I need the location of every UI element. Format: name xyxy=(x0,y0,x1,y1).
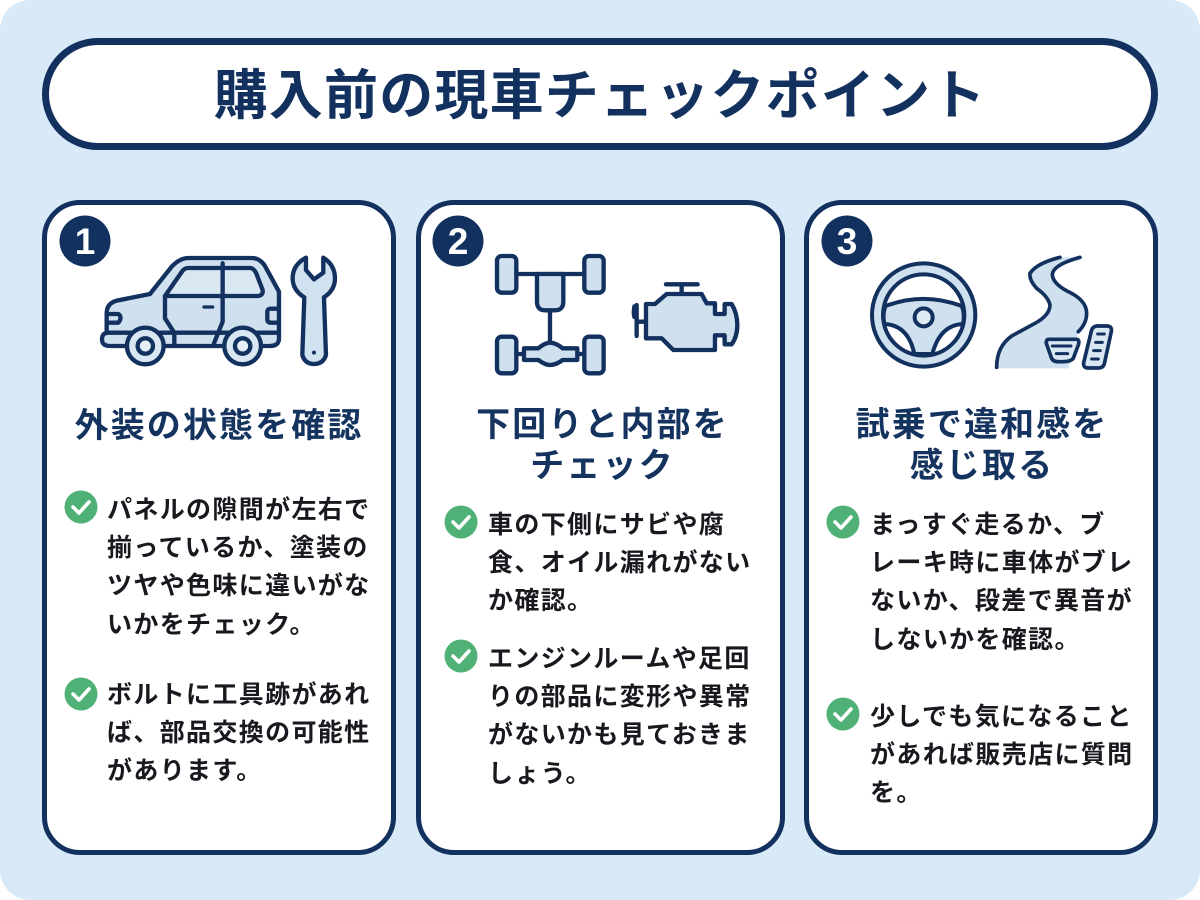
title banner xyxy=(42,38,1158,150)
number badge 1: 1 xyxy=(75,221,95,262)
text 3-1: しないかを確認。 xyxy=(870,626,1081,654)
heading: underbody xyxy=(476,406,729,485)
text 3-2 xyxy=(870,703,1134,807)
text 2-2: エンジンルームや足回 xyxy=(488,645,751,673)
heading: underbody: 下回りと内部を xyxy=(476,406,729,444)
text 3-1 xyxy=(870,511,1134,654)
text 3-2: を。 xyxy=(870,779,923,807)
text 3-1: まっすぐ走るか、ブ xyxy=(870,511,1106,539)
text 1-1: 揃っているか、塗装の xyxy=(107,534,369,562)
title banner: 購入前の現車チェックポイント xyxy=(214,66,986,126)
text 2-1: 車の下側にサビや腐 xyxy=(488,511,725,539)
heading: underbody: チェック xyxy=(530,447,675,485)
text 2-2 xyxy=(488,645,752,788)
text 1-2: があります。 xyxy=(107,757,263,785)
panel: exterior xyxy=(42,200,396,855)
panel: underbody and interior xyxy=(416,200,785,855)
text 1-2: ば、部品交換の可能性 xyxy=(107,719,371,747)
text 2-2: りの部品に変形や異常 xyxy=(488,683,752,711)
text 1-1: いかをチェック。 xyxy=(107,611,316,639)
text 2-2: しょう。 xyxy=(488,760,592,788)
text 1-2 xyxy=(107,681,371,785)
heading: test drive xyxy=(856,406,1108,485)
text 1-1: パネルの隙間が左右で xyxy=(107,496,371,524)
text 1-1: ツヤや色味に違いがな xyxy=(107,572,371,600)
text 2-1 xyxy=(488,511,752,615)
heading: exterior: 外装の状態を確認 xyxy=(75,407,363,445)
panel: test drive xyxy=(804,200,1158,855)
text 3-2: 少しでも気になること xyxy=(870,703,1133,731)
text 3-2: があれば販売店に質問 xyxy=(870,741,1134,769)
text 2-1: か確認。 xyxy=(488,587,593,615)
text 3-1: レーキ時に車体がブレ xyxy=(870,549,1134,577)
text 1-1 xyxy=(107,496,371,639)
text 2-1: 食、オイル漏れがない xyxy=(488,549,752,577)
text 2-2: がないかも見ておきま xyxy=(488,721,751,749)
text 1-2: ボルトに工具跡があれ xyxy=(107,681,371,709)
number badge 3: 3 xyxy=(837,221,857,262)
number badge 2: 2 xyxy=(448,221,468,262)
heading: test drive: 試乗で違和感を xyxy=(856,406,1108,444)
heading: test drive: 感じ取る xyxy=(910,447,1054,485)
text 3-1: ないか、段差で異音が xyxy=(870,587,1133,615)
